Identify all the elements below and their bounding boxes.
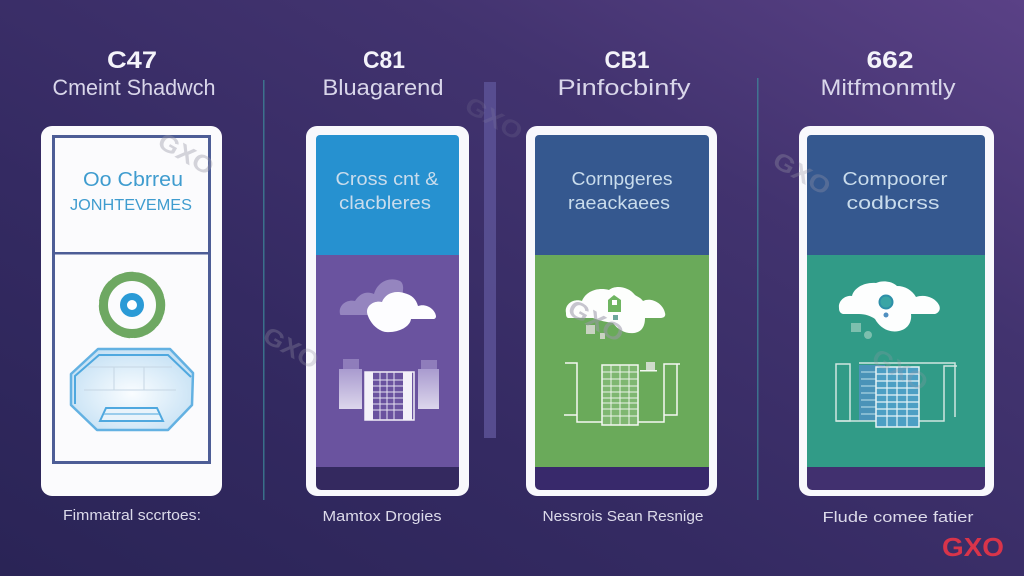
column 3 heading xyxy=(558,47,690,100)
caption 1: Fimmatral sccrtoes: xyxy=(63,507,201,524)
card 4 label: codbcrss xyxy=(846,193,940,213)
card 3 label: Cornpgeres xyxy=(572,169,672,189)
caption 4: Flude comee fatier xyxy=(822,509,974,526)
column 2 heading: C81 xyxy=(363,47,405,74)
icon: cloud with swirl xyxy=(839,281,940,339)
watermarks: GXO xyxy=(460,92,527,146)
card 1 label: JONHTEVEMES xyxy=(70,197,192,214)
watermarks: GXO xyxy=(258,322,323,375)
column 1 heading: Cmeint Shadwch xyxy=(52,75,216,100)
card 3 label xyxy=(568,169,672,213)
column 2 heading: Bluagarend xyxy=(322,75,444,100)
watermarks: GXO xyxy=(563,295,628,348)
icon: blue octagonal device xyxy=(71,349,193,430)
caption 3: Nessrois Sean Resnige xyxy=(542,508,704,525)
column 4 heading: 662 xyxy=(866,47,914,74)
card 2 label xyxy=(336,169,438,213)
logo: GXO: GXO xyxy=(942,532,1004,562)
icon: rack with side brackets xyxy=(564,362,680,425)
column 1 heading xyxy=(52,47,216,100)
card 1 label xyxy=(70,169,192,214)
panel: card 2 xyxy=(306,126,469,496)
column 3 heading: Pinfocbinfy xyxy=(558,75,690,100)
panel: card 3 xyxy=(526,126,717,496)
caption 2: Mamtox Drogies xyxy=(322,508,442,525)
icon: clouds xyxy=(340,279,436,332)
card 2 label: Cross cnt & xyxy=(336,169,438,189)
column 2 heading xyxy=(322,47,444,100)
icon: green gear ring xyxy=(100,273,164,337)
icon: server block xyxy=(339,359,439,420)
icon: cloud with badge xyxy=(566,287,665,339)
column 1 heading: C47 xyxy=(107,47,157,74)
watermarks: GXO xyxy=(867,344,932,397)
column 4 heading xyxy=(820,47,956,100)
icon: table and panels xyxy=(836,363,957,427)
card 3 label: raeackaees xyxy=(568,193,670,213)
card 2 label: clacbleres xyxy=(339,193,431,213)
card 1 label: Oo Cbrreu xyxy=(83,169,183,191)
column 3 heading: CB1 xyxy=(604,47,650,74)
watermarks xyxy=(153,92,932,397)
column 4 heading: Mitfmonmtly xyxy=(820,75,956,100)
watermarks: GXO xyxy=(768,147,835,201)
card 4 label xyxy=(842,169,948,213)
panel: card 1 xyxy=(41,126,222,496)
watermarks: GXO xyxy=(153,128,218,181)
card 4 label: Compoorer xyxy=(842,169,948,189)
panel: card 4 xyxy=(799,126,994,496)
